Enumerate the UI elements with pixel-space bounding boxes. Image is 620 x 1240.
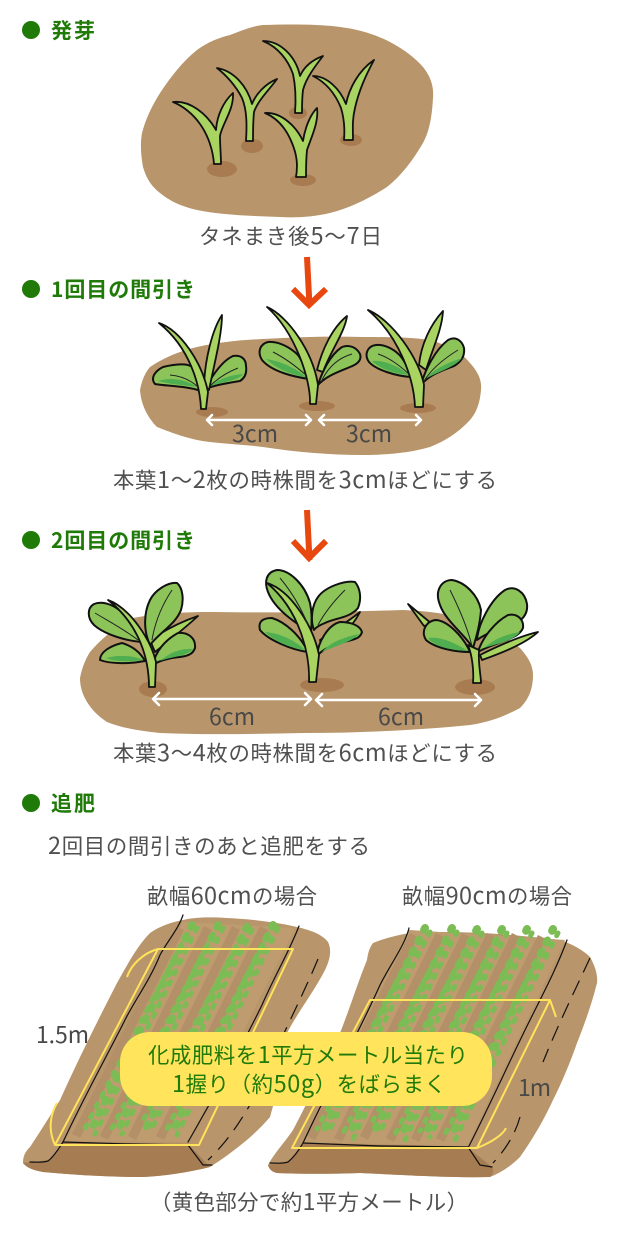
- heading: 2回目の間引き: 2回目の間引き: [51, 525, 195, 555]
- heading: 発芽: 発芽: [51, 15, 95, 45]
- label: 1.5m: 1.5m: [36, 1016, 89, 1050]
- callout: fertilizer instruction: 1握り（約50g）をばらまく: [172, 1065, 446, 1099]
- illustration: thinning at 3cm: [140, 307, 481, 455]
- heading: 追肥: [22, 788, 95, 818]
- illustration: thinning at 6cm: [80, 570, 538, 734]
- text: 追肥 note: 2回目の間引きのあと追肥をする: [48, 827, 370, 861]
- callout: fertilizer instruction: [120, 1032, 492, 1106]
- heading: 発芽: [22, 15, 95, 45]
- label: 1m: 1m: [518, 1069, 551, 1103]
- illustration: thinning at 3cm: 3cm: [232, 415, 278, 449]
- illustration: thinning at 6cm: 6cm: [209, 698, 255, 732]
- label: 畝幅60cm: 畝幅60cmの場合: [147, 877, 317, 911]
- arrow: red down 1: [293, 257, 326, 306]
- heading: 1回目の間引き: 1回目の間引き: [51, 274, 195, 304]
- heading: 追肥: 追肥: [51, 788, 95, 818]
- caption: 黄色部分: （黄色部分で約1平方メートル）: [150, 1183, 468, 1217]
- callout: fertilizer instruction: 化成肥料を1平方メートル当たり: [148, 1036, 468, 1070]
- arrow: red down 2: [293, 510, 326, 560]
- label: 畝幅90cm: 畝幅90cmの場合: [402, 877, 572, 911]
- illustration: thinning at 3cm: 3cm: [346, 415, 392, 449]
- illustration: sprouts on soil: [141, 24, 433, 217]
- illustration: thinning at 6cm: 6cm: [378, 698, 424, 732]
- illustration: bed 60cm: [23, 915, 330, 1177]
- illustration: bed 90cm: [268, 928, 597, 1177]
- caption: 本葉3〜4枚: 本葉3〜4枚の時株間を6cmほどにする: [113, 734, 497, 768]
- caption: タネまき後: タネまき後5〜7日: [199, 217, 382, 251]
- caption: 本葉1〜2枚: 本葉1〜2枚の時株間を3cmほどにする: [113, 461, 497, 495]
